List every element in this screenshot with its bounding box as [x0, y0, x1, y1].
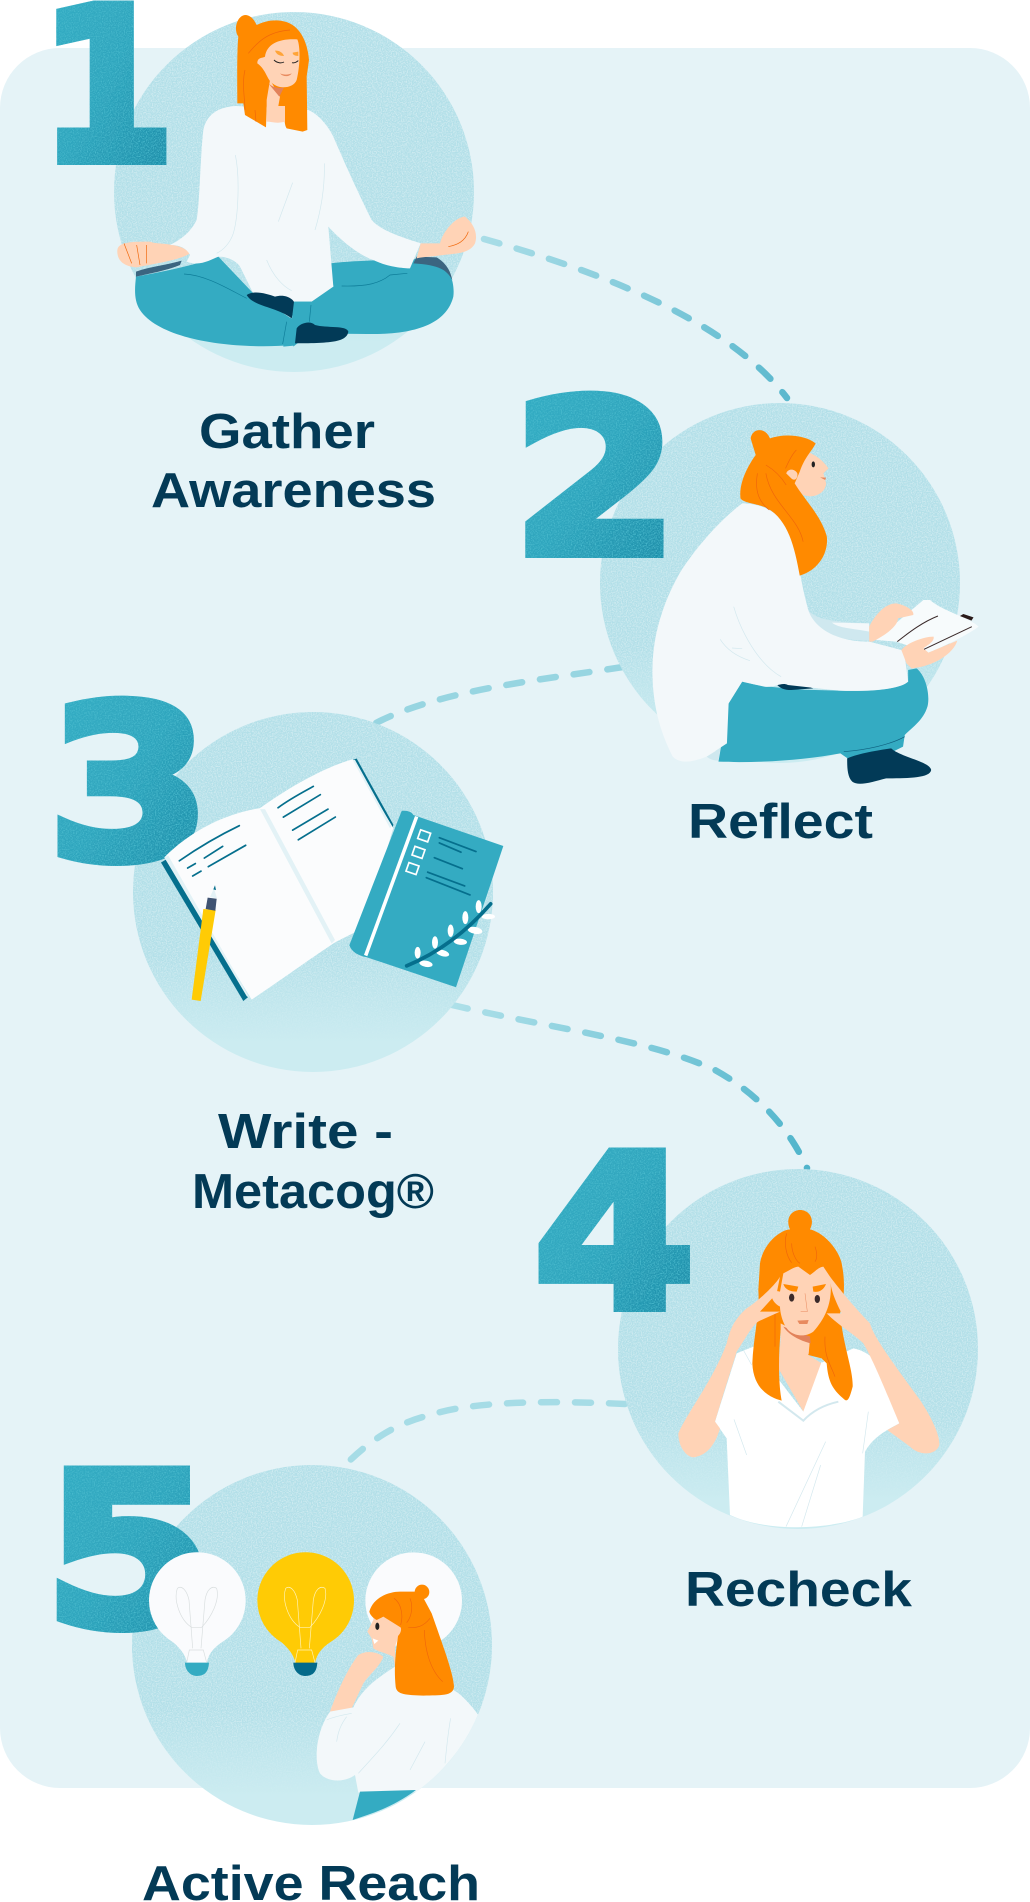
number 5: 5: [44, 1429, 214, 1676]
circle backdrop 5: [132, 1465, 492, 1825]
label: Gather Awareness: [151, 405, 436, 518]
connector: step 1 to step 2: [484, 239, 787, 398]
woman thinking: [317, 1585, 478, 1820]
connector: step 4 to step 5: [342, 1402, 625, 1468]
label: Reflect: Reflect: [688, 795, 873, 849]
figure: open book, notebook and pencil: [161, 759, 503, 1001]
figure: seated woman with tablet: [652, 430, 979, 784]
step 3: write - metacog: [47, 661, 503, 1219]
circle backdrop 2: [600, 403, 960, 763]
label: Write - Metacog: [192, 1105, 434, 1219]
circle backdrop 1: [114, 12, 474, 372]
label: Write - Metacog: Write -: [218, 1105, 393, 1159]
number 2: 2: [512, 357, 679, 604]
step 5: active reach: [56, 1465, 492, 1900]
icon: light bulb off: [149, 1552, 246, 1676]
circle backdrop 3: [133, 712, 493, 1072]
figure: frustrated woman holding her temples: [678, 1210, 939, 1527]
step 1: gather awareness: [39, 0, 476, 518]
label: Write - Metacog: Metacog®: [192, 1165, 434, 1219]
label: Gather Awareness: Gather: [199, 405, 375, 459]
connector: step 2 to step 3: [376, 667, 623, 723]
number 4: 4: [534, 1111, 695, 1358]
connector: step 3 to step 4: [452, 1005, 807, 1168]
circle backdrop 4: [618, 1169, 978, 1529]
icon: light bulb behind woman: [365, 1552, 462, 1649]
number 3: 3: [47, 661, 211, 908]
label: Gather Awareness: Awareness: [151, 464, 436, 518]
figure: light bulbs and thinking woman: [149, 1552, 478, 1820]
figure: meditating woman: [117, 15, 476, 347]
step 4: recheck: [534, 1111, 978, 1617]
step 2: reflect: [512, 357, 979, 849]
label: Recheck: Recheck: [685, 1563, 913, 1617]
icon: light bulb on: [257, 1552, 354, 1676]
